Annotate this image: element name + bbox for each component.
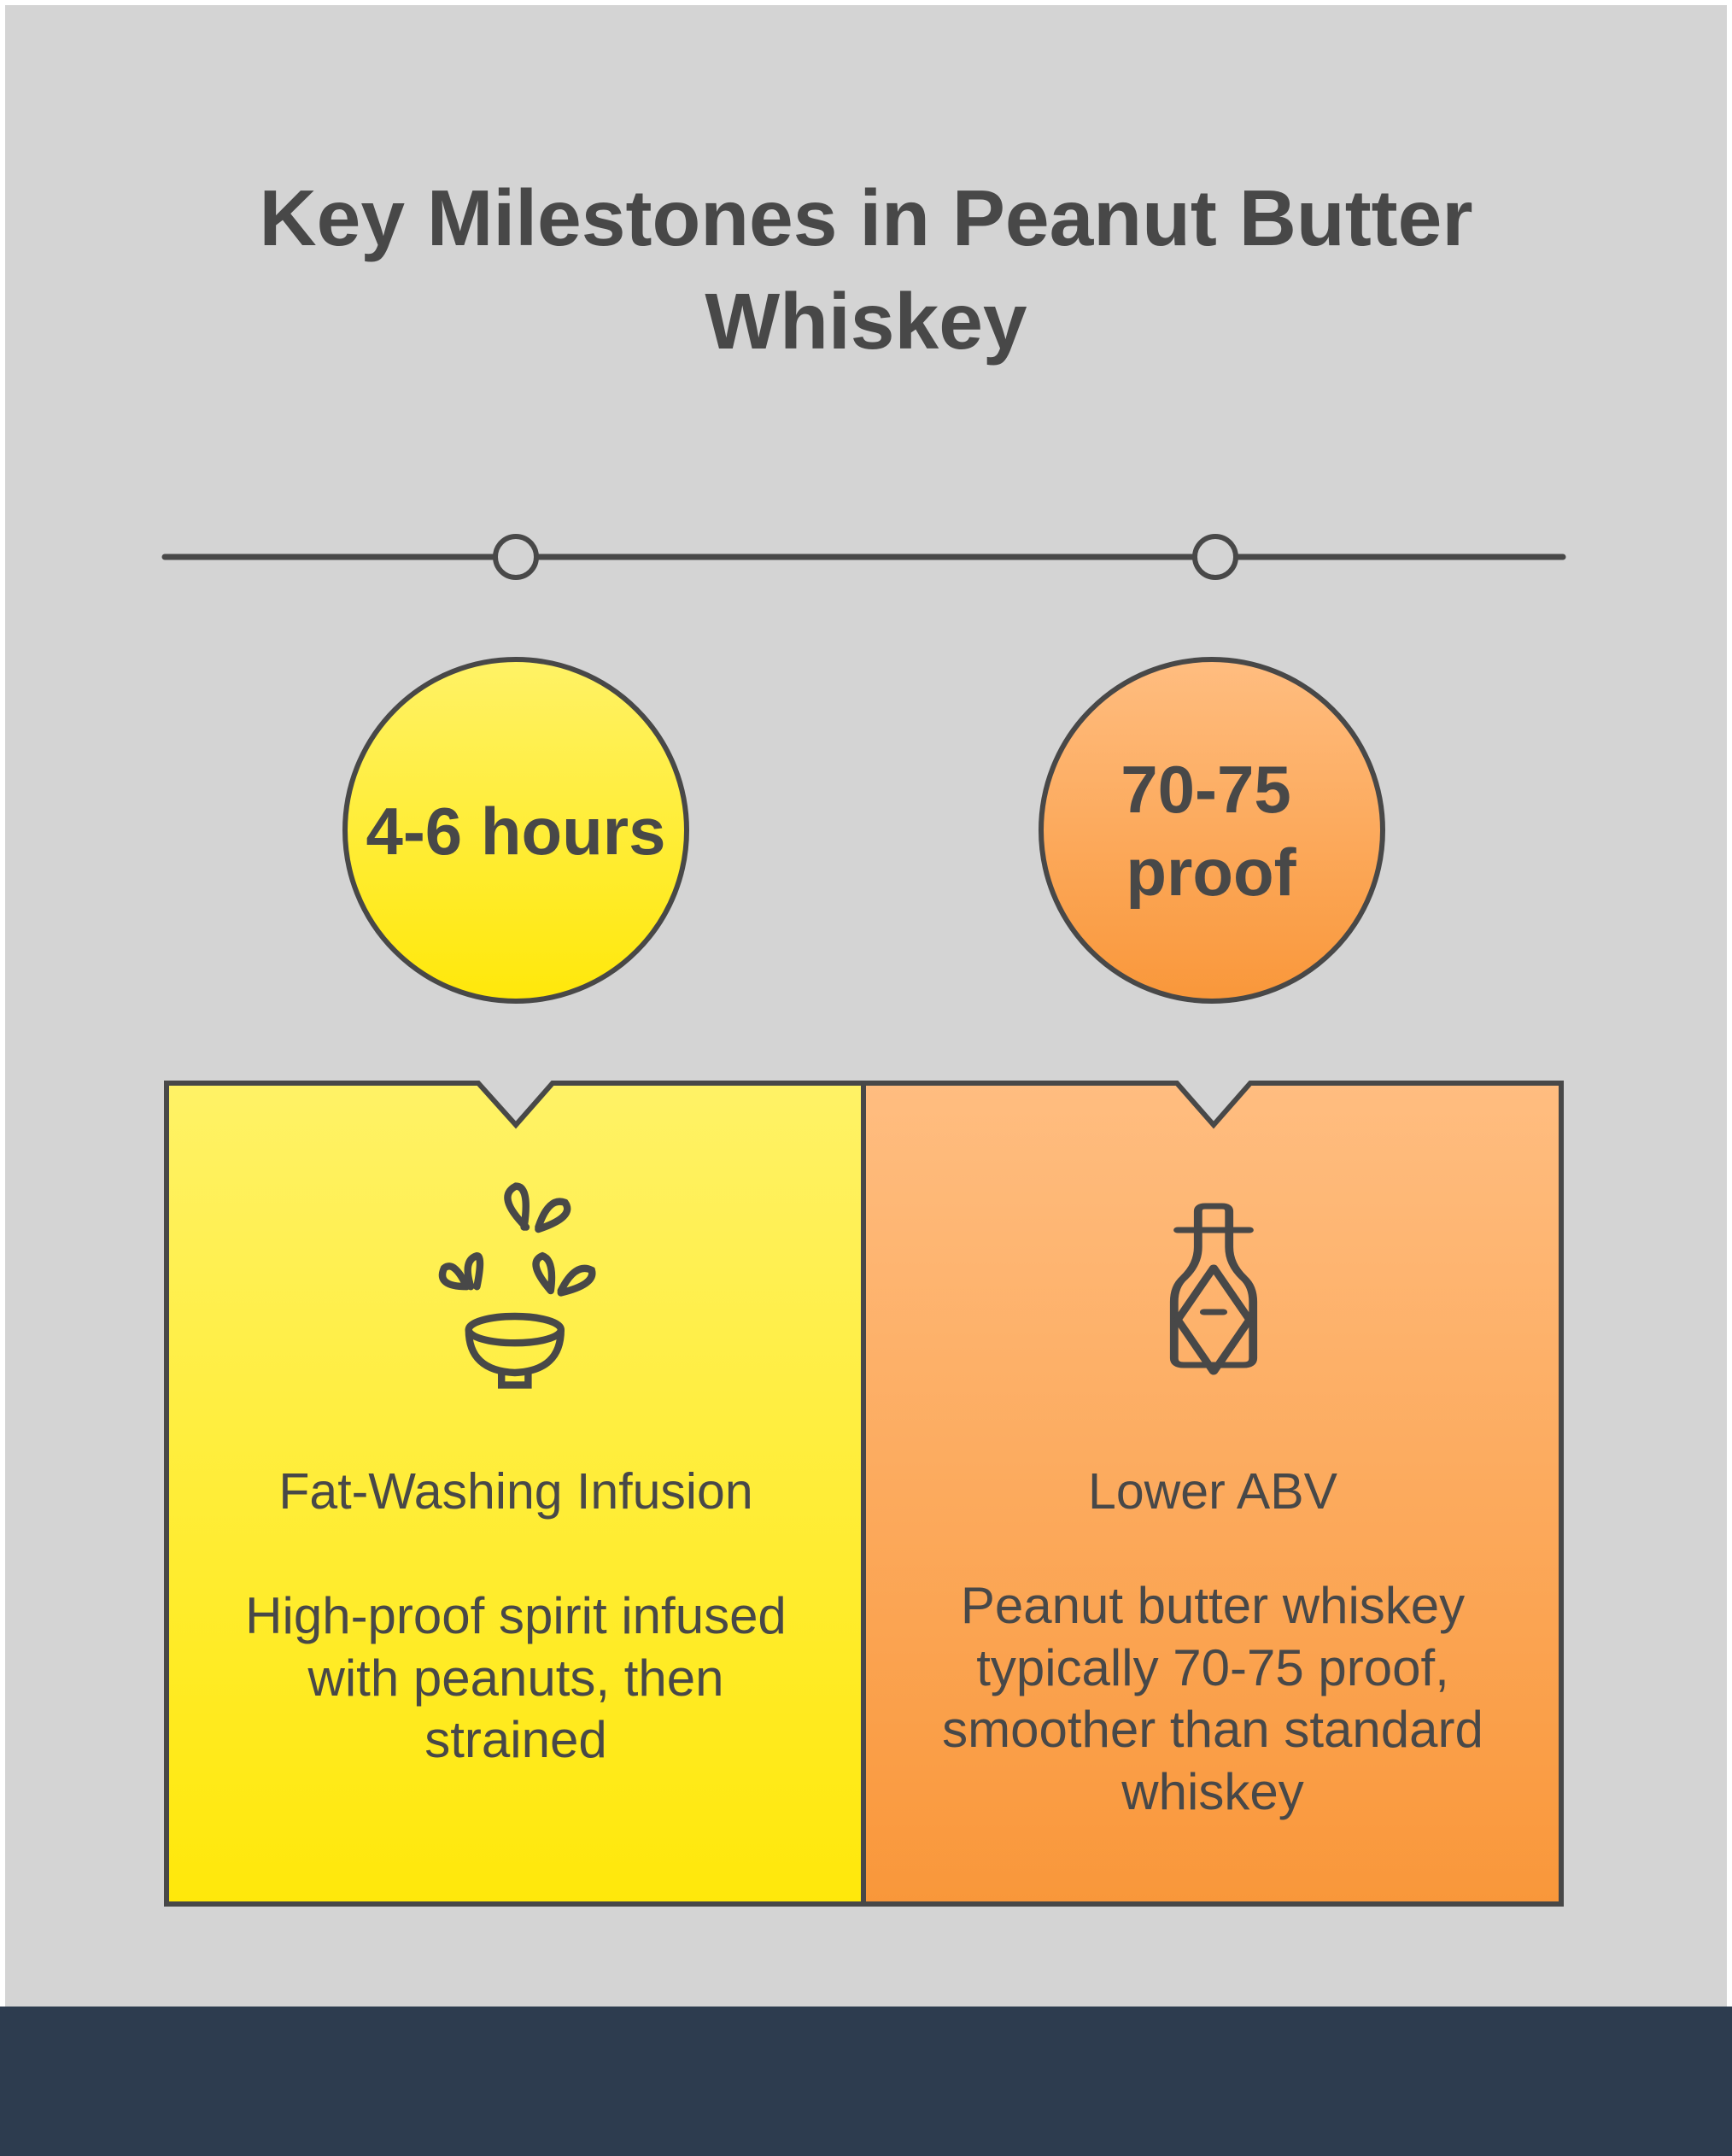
icon: peanuts and bowl xyxy=(442,1186,592,1385)
text: description: strained xyxy=(424,1711,607,1768)
circle: 70-75 proof xyxy=(1041,659,1383,1001)
text: description: Peanut butter whiskey xyxy=(961,1577,1465,1634)
text: description: High-proof spirit infused xyxy=(245,1587,787,1644)
text: description: whiskey xyxy=(1121,1763,1304,1820)
circle: 4-6 hours: 4-6 hours xyxy=(366,794,666,869)
text: description: smoother than standard xyxy=(942,1701,1483,1758)
panel: lower ABV xyxy=(863,1083,1561,1904)
icon: bottle xyxy=(1174,1206,1253,1372)
title: Whiskey xyxy=(705,277,1027,366)
circle: 4-6 hours xyxy=(345,659,687,1001)
title: Key Milestones in Peanut Butter xyxy=(259,173,1473,262)
text: description: with peanuts, then xyxy=(307,1649,724,1707)
title xyxy=(259,173,1473,366)
footer bar xyxy=(0,2007,1732,2156)
circle: 70-75 proof: proof xyxy=(1126,835,1297,910)
text: description: typically 70-75 proof, xyxy=(976,1639,1449,1696)
heading: Fat-Washing Infusion: Fat-Washing Infusion xyxy=(278,1463,753,1520)
panel: fat-washing xyxy=(167,1083,863,1904)
heading: Lower ABV: Lower ABV xyxy=(1088,1463,1338,1520)
circle: 70-75 proof: 70-75 xyxy=(1121,752,1291,827)
